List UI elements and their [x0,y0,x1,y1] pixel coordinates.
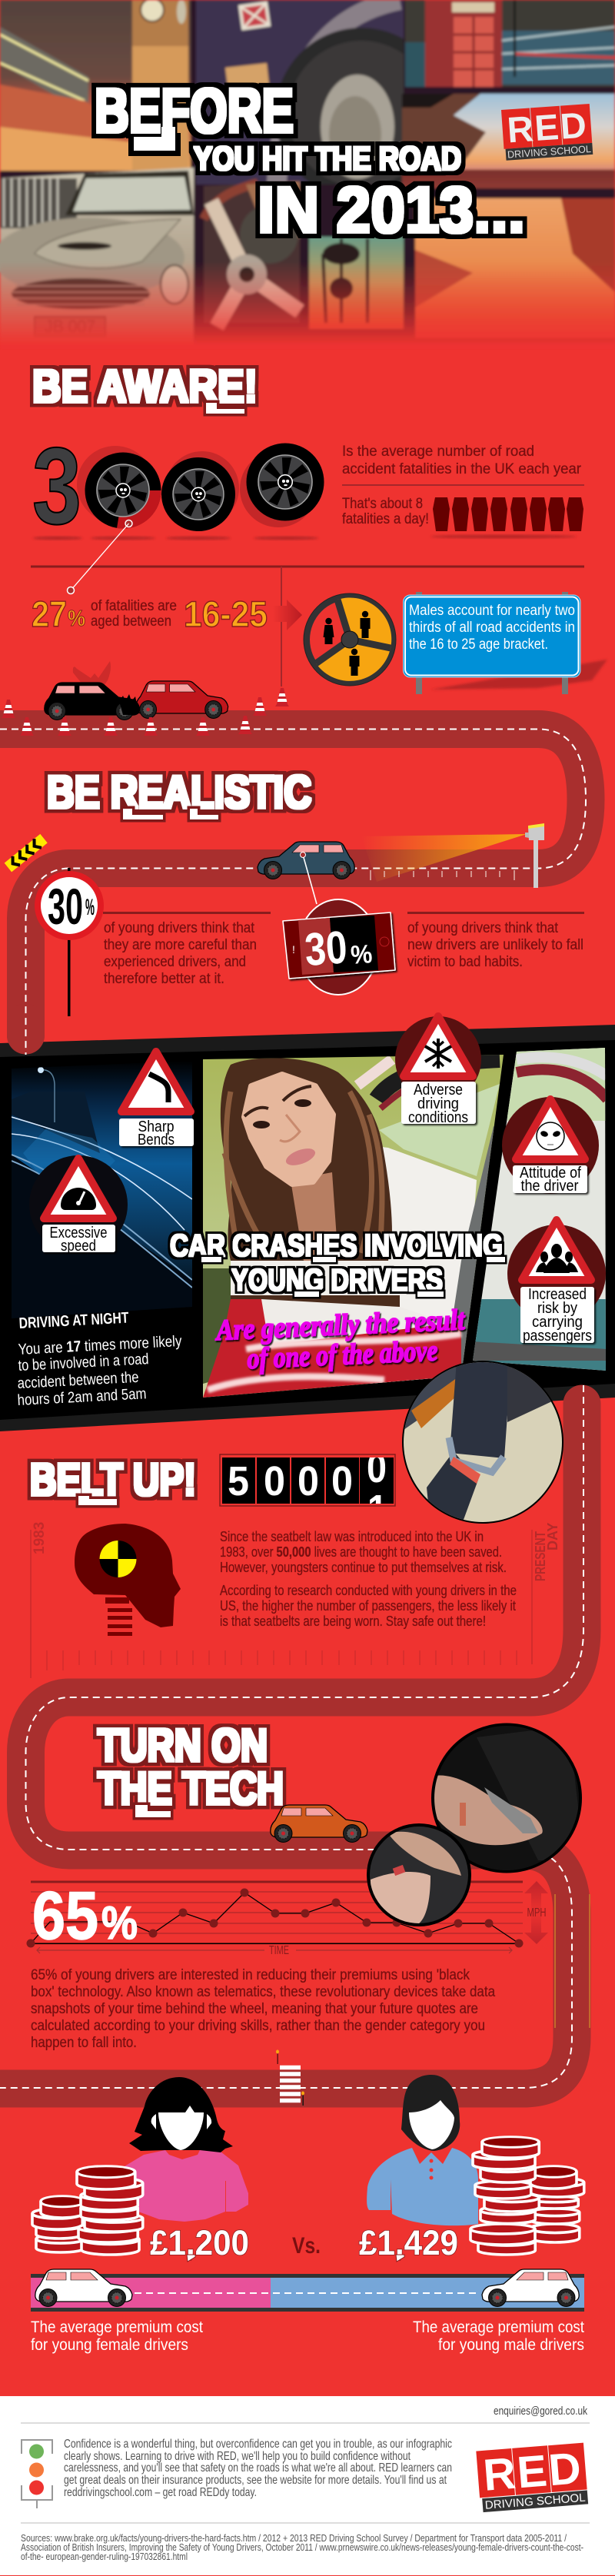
photo: night road [12,1061,192,1318]
logo: RED Driving School: DRIVING SCHOOL [507,143,591,161]
crashed cars [45,681,228,720]
digit 3: 3 [32,425,81,547]
caption: male premium [413,2318,584,2354]
seat belt [454,1126,494,1364]
timeline: 1983 to present day: PRESENT [533,1531,548,1581]
text: bad habits: of young drivers think that [407,920,559,936]
label [119,1118,194,1148]
heading: Be aware: BE AWARE! [32,361,258,412]
logo: RED Driving School footer: DRIVING SCHOOL [484,2491,586,2512]
photo: classic car wheel [195,0,404,186]
warning sign: adverse conditions [395,1016,481,1126]
wheel three [240,443,324,527]
divider [31,566,584,567]
icon: male figure [360,611,371,638]
text: black box technology: snapshots of your time behind the wheel, meaning that your future quotes are [31,2001,478,2017]
odometer 50001: 0 [298,1458,319,1504]
door glare [208,1334,461,1390]
text: driving at night: hours of 2am and 5am [17,1385,147,1409]
phone stat: 30 percent [283,899,395,995]
heading: turn on the tech: TURN ON [98,1720,268,1771]
text: closing paragraph: carelessness, and you'll see that safety on the roads is what we're all about. RED learners can [64,2461,452,2475]
title: Before you hit the road in 2013: BEFORE [95,76,294,146]
text: closing paragraph: get great deals on their insurance products, see the website for more details. You'll find us at [64,2474,447,2487]
ground shadows [33,537,318,540]
icon: angel silhouette [73,661,111,711]
photo: Aston Martin JB 007: JB 007 [45,317,95,336]
callout line from wheel slice to 27 percent [68,524,129,593]
crumple spikes [119,694,140,715]
arrow [273,600,302,630]
subheading: generally the result [214,1304,466,1375]
text: careful than experienced: therefore better at it. [104,971,224,987]
footer background [0,2396,615,2576]
wheel with 27 percent red slice [77,446,161,529]
road centre dashes [0,729,586,1055]
bottom red line [0,2575,615,2576]
stat: 27 percent aged 16-25: 27 [32,593,67,634]
odometer 50001: 5 [228,1458,249,1504]
timeline: 1983 to present day: DAY [545,1523,560,1551]
red car door [203,1299,461,1398]
road sign: males account: Males account for nearly two [409,603,575,619]
icon: snowflake [425,1039,451,1069]
heading: turn on the tech: THE TECH [98,1763,284,1814]
photo circle: seatbelt [400,1361,569,1526]
TIME axis [37,1944,512,1957]
label [520,1286,594,1345]
footer email: enquiries@gored.co.uk [494,2405,587,2418]
icon: hazard chevrons [5,834,48,872]
fatalities text [342,444,582,477]
logo: RED Driving School: RED [506,104,587,151]
fatalities a day text [342,496,429,527]
stat: 27 percent aged 16-25: aged between [91,613,171,630]
road sign: males account [403,592,607,694]
photo: Big Ben and Parliament [0,0,191,171]
caption: female premium: The average premium cost [31,2318,203,2336]
icon: bend arrow [149,1074,168,1102]
TIME axis: TIME [269,1944,289,1957]
hair [221,1058,392,1261]
stat: 27 percent aged 16-25: % [68,607,85,631]
fatalities a day text: fatalities a day! [342,511,429,527]
text: seatbelt law: Since the seatbelt law was introduced into the UK in [220,1529,484,1544]
road bar: premium comparison [31,2269,584,2312]
fatalities text: Is the average number of road [342,444,534,460]
lower shirt and hands [261,1299,400,1322]
label: Adverse [414,1082,463,1099]
stat: 65 percent: % [101,1897,138,1949]
text: closing paragraph [64,2438,452,2499]
photo circle: black box small [367,1823,474,1930]
road measuring ticks [371,870,514,880]
phone stat: 30 percent: ! [292,943,295,956]
phone stat: 30 percent: % [350,939,373,970]
logo: RED Driving School footer: RED [481,2443,583,2501]
fatalities a day text: That's about 8 [342,496,423,512]
text: careful than experienced [104,920,257,987]
text: seatbelt law: According to research conducted with young drivers in the [220,1583,517,1598]
icon: traffic light [22,2440,52,2508]
text: black box technology: happen to fall into. [31,2035,137,2051]
red car [136,681,228,718]
white car left [35,2269,132,2306]
cone row back [2,688,289,718]
title: Before you hit the road in 2013 [95,76,525,246]
coin stack: female premium [32,2166,143,2255]
face and ears [151,2106,211,2150]
speed camera beam [361,834,527,882]
stat sign: 30 percent: % [85,895,95,920]
icon: male figure two [349,649,360,676]
label: Excessive [49,1225,108,1241]
subheading: generally the result: of one of the above [247,1335,438,1375]
label: Increased [528,1286,587,1303]
label: passengers [523,1328,592,1345]
odometer 50001: 1 [367,1487,387,1533]
text: driving at night: accident between the [17,1369,139,1392]
icon: union jack sticker [238,2,271,30]
icon: female figure [323,618,334,644]
phone stat: 30 percent: 30 [303,921,349,976]
divider under fatalities text [342,484,584,486]
text: sources [21,2532,583,2562]
photo circle: black box large [430,1722,584,1876]
road end over band [7,1022,45,1035]
icon: crash test dummy head [75,1524,181,1636]
label: Sharp [138,1118,174,1135]
belisha beacon right [301,2091,304,2106]
steering wheel pie chart: two thirds male [304,593,396,686]
fatalities text: accident fatalities in the UK each year [342,461,582,477]
text: seatbelt law: However, youngsters continue to put themselves at risk. [220,1560,507,1575]
photo: blurred road [415,198,615,338]
man figure [367,2075,478,2225]
photo collage header [0,0,615,350]
text: black box technology [31,1967,495,2051]
lips [286,1148,315,1165]
divider right [407,912,584,914]
icon: group of people [536,1244,578,1273]
text: seatbelt law: 1983, over 50,000 lives are thought to have been saved. [220,1544,502,1560]
text: closing paragraph: Confidence is a wonderful thing, but overconfidence can get you in trouble, as our infographic [64,2438,452,2451]
photo: palm trees [309,237,404,329]
R tail [206,403,244,414]
label [513,1165,587,1195]
odometer 50001 [219,1454,396,1507]
letter tails [123,809,218,819]
text: bad habits: victim to bad habits. [407,954,523,970]
line chart: speed over time [26,1877,548,1957]
text: driving at night [17,1310,182,1409]
label [401,1082,476,1126]
hair strands [224,1092,382,1253]
car door frame [357,1059,500,1109]
cone row front [20,716,252,736]
pink top [125,2150,248,2222]
caption: female premium [31,2318,203,2354]
car window background [379,1084,500,1176]
label: speed [61,1238,96,1255]
text: black box technology: 65% of young drivers are interested in reducing their premiums using 'black [31,1967,470,1983]
photo: steering wheel [204,181,300,327]
title: Before you hit the road in 2013: YOU HIT THE ROAD [194,140,461,178]
label: conditions [408,1109,468,1126]
icon: speedometer [61,1188,96,1210]
vertical divider [281,567,282,686]
icon: angry face [537,1122,564,1150]
road edge lines [555,1894,590,2028]
text: sources: of-the- european-gender-ruling-197032861.html [21,2551,188,2562]
label: Bends [138,1132,175,1148]
caption: male premium: The average premium cost [413,2318,584,2336]
woman figure [125,2077,248,2222]
heading: turn on the tech [98,1720,284,1817]
title: Before you hit the road in 2013: IN 2013... [258,174,525,246]
eyes and brows [244,1086,311,1128]
road sign: males account: thirds of all road accidents in [409,620,575,636]
callout line from car to phone [300,852,317,904]
letter tails [201,1257,505,1297]
timeline: 1983 to present day: 1983 [32,1522,48,1554]
label: carrying [532,1314,583,1331]
stat: 65 percent: 65 [32,1877,98,1953]
warning sign: attitude of the driver [502,1097,599,1195]
stat: 27 percent aged 16-25: 16-25 [184,593,268,634]
heading: Be realistic: BE REALISTIC [47,766,311,818]
text: seatbelt law [220,1529,517,1629]
photo: right panel [469,1045,607,1376]
warning sign: increased risk by carrying passengers [507,1220,606,1345]
heading: car crashes involving young drivers: YOUNG DRIVERS [231,1262,443,1298]
coin stack: male premium [470,2137,584,2255]
timeline: 1983 to present day [31,1522,560,1678]
divider left [103,912,271,914]
white car right [482,2269,579,2306]
odometer 50001: 0 [264,1458,285,1504]
L tail [78,1496,117,1505]
text: black box technology: box' technology. Also known as telematics, these revolutionary devices take data [31,1984,495,2000]
MPH axis: MPH [527,1906,546,1920]
photo: young woman driver [203,1053,514,1399]
lower hair [231,1295,400,1307]
text: seatbelt law: US, the higher the number of passengers, the less likely it [220,1598,516,1614]
black car [45,683,139,720]
text: driving at night: to be involved in a road [18,1351,149,1374]
stat: 27 percent aged 16-25 [32,593,268,634]
heading: car crashes involving young drivers: CAR CRASHES INVOLVING [170,1228,503,1263]
dark photo band [0,1025,615,1431]
header fade to red [0,261,615,350]
stat: 27 percent aged 16-25: of fatalities are [91,598,177,614]
text: black box technology: calculated according to your driving skills, rather than the gender category you [31,2018,485,2034]
MPH axis [524,1881,548,1944]
wheel two [161,451,239,531]
odometer 50001: 0 [367,1445,387,1491]
white shirt [231,1145,477,1384]
3000 wheel figure [32,425,324,547]
icon: eight coffins [430,497,583,538]
road sign: males account: the 16 to 25 age bracket. [409,637,548,653]
teal car [258,842,354,879]
photo: telephone box [405,0,615,87]
label [42,1225,115,1255]
heading: belt up: BELT UP! [30,1454,196,1505]
F tail outline [134,138,175,151]
subheading: generally the result: Are generally the result [214,1304,466,1347]
icon: speed camera [525,823,544,888]
price: female: £1,200 [150,2223,249,2262]
text: careful than experienced: they are more careful than [104,937,257,953]
caption: female premium: for young female drivers [31,2336,188,2354]
belisha beacon left [276,2049,279,2064]
label: risk by [537,1300,577,1317]
text: bad habits [407,920,583,970]
stat sign: 30 percent [35,868,104,1016]
label: Attitude of [520,1165,581,1182]
road: second winding section [0,1404,582,2089]
warning sign: sharp bends [119,1052,194,1148]
text: careful than experienced: of young drivers think that [104,920,255,936]
nose [280,1115,300,1142]
photo: Aston Martin JB 007 [0,168,194,346]
caption: male premium: for young male drivers [438,2336,584,2354]
odometer 50001: 0 [331,1458,353,1504]
text: closing paragraph: clearly shows. Learning to drive with RED, we'll help you to build confidence without [64,2450,411,2463]
stat sign: 30 percent: 30 [48,878,83,935]
interior dark left [203,1268,231,1384]
zebra crossing [276,2049,304,2106]
text: seatbelt law: is that seatbelts are being worn. Stay safe out there! [220,1614,486,1629]
text: driving at night: You are 17 times more likely [18,1333,182,1358]
text: driving at night: DRIVING AT NIGHT [18,1310,129,1332]
hair [129,2077,233,2152]
label: driving [417,1095,459,1112]
text: bad habits: new drivers are unlikely to fall [407,937,583,953]
neck [291,1172,338,1261]
heading: car crashes involving young drivers [170,1228,505,1298]
road dashes second section [0,1385,583,2088]
L tail [135,1805,171,1817]
label: the driver [521,1178,579,1195]
text: careful than experienced: experienced drivers, and [104,954,246,970]
versus: Vs. [292,2233,321,2259]
F tail [134,127,175,151]
face [244,1075,333,1184]
road: first winding section [0,729,586,1035]
footer rules [21,2423,590,2523]
text: closing paragraph: reddrivingschool.com – get road REDdy today. [64,2486,257,2499]
orange car [271,1805,367,1842]
price: male: £1,429 [359,2223,458,2262]
photo: beach and lifeguard hut [402,94,615,188]
warning sign: excessive speed [29,1155,128,1255]
